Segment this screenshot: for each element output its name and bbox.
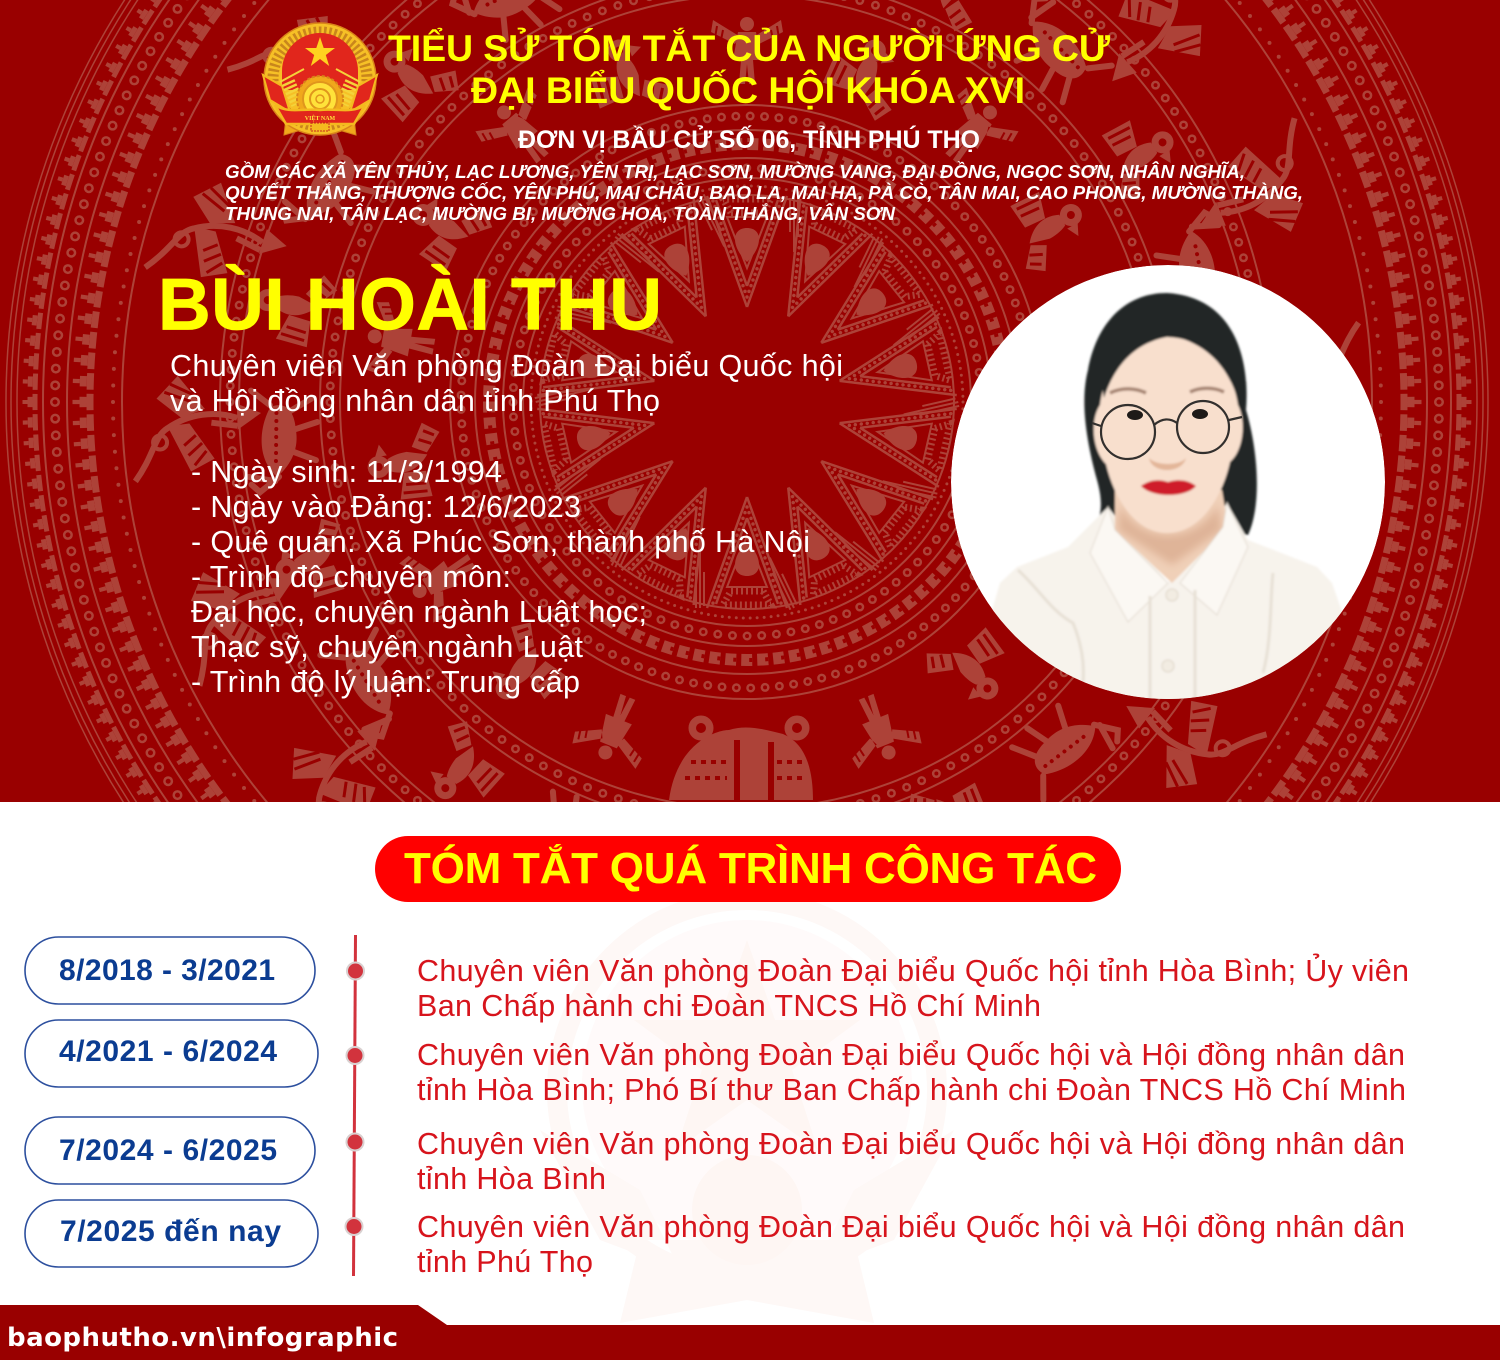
nose	[1149, 458, 1186, 470]
period 1	[25, 937, 315, 1004]
period 2	[25, 1020, 318, 1087]
entry 1	[417, 952, 1409, 1023]
portrait photo	[951, 265, 1385, 720]
watermark emblem	[540, 900, 954, 1323]
footer bar	[0, 1305, 1500, 1360]
entry 4	[417, 1210, 1405, 1279]
hair	[1072, 293, 1257, 544]
period 1: 8/2018 - 3/2021	[59, 954, 275, 987]
entry 2	[417, 1038, 1406, 1107]
text block: personal details: - Ngày sinh: 11/3/1994	[191, 455, 502, 489]
hairline	[1101, 335, 1236, 398]
text block: position: và Hội đồng nhân dân tỉnh Phú Thọ	[170, 384, 660, 418]
text block: personal details: - Trình độ lý luận: Trung cấp	[191, 665, 580, 699]
title: ĐẠI BIỂU QUỐC HỘI KHÓA XVI	[471, 69, 1025, 111]
shirt details	[1018, 570, 1273, 700]
shirt	[960, 503, 1380, 720]
crane band	[133, 0, 1384, 802]
entry 4: tỉnh Phú Thọ	[417, 1245, 593, 1279]
text block: personal details: - Trình độ chuyên môn:	[191, 560, 511, 594]
candidate name: BÙI HOÀI THU	[158, 264, 662, 346]
heading pill: work history	[375, 836, 1121, 902]
period 4	[25, 1200, 318, 1267]
entry 3: Chuyên viên Văn phòng Đoàn Đại biểu Quốc hội và Hội đồng nhân dân	[417, 1127, 1405, 1161]
entry 3	[417, 1127, 1405, 1196]
text block: communes list: THUNG NAI, TÂN LẠC, MƯỜNG BI, MƯỜNG HOA, TOÀN THẮNG, VÂN SƠN	[225, 203, 895, 224]
panel: red header with bronze drum pattern	[0, 0, 1500, 802]
timeline dots	[346, 962, 364, 1235]
period 3: 7/2024 - 6/2025	[59, 1134, 277, 1167]
face	[1094, 337, 1243, 533]
title: TIỂU SỬ TÓM TẮT CỦA NGƯỜI ỨNG CỬ	[388, 27, 1111, 69]
text block: personal details: Thạc sỹ, chuyên ngành Luật	[191, 630, 584, 664]
icon: national emblem	[263, 23, 377, 135]
text block: personal details: - Ngày vào Đảng: 12/6/2023	[191, 490, 581, 524]
drum pattern background	[5, 0, 1489, 802]
collar	[1106, 504, 1168, 622]
entry 3: tỉnh Hòa Bình	[417, 1162, 606, 1196]
text block: communes list: QUYẾT THẮNG, THƯỢNG CỐC, YÊN PHÚ, MAI CHÂU, BAO LA, MAI HẠ, PÀ CÒ, TÂN MAI, CAO PHONG, MƯỜNG THÀNG,	[225, 182, 1303, 203]
icon: national emblem: VIỆT NAM	[305, 114, 336, 122]
timeline line	[354, 935, 356, 1276]
period 2: 4/2021 - 6/2024	[59, 1035, 277, 1068]
heading pill: work history: TÓM TẮT QUÁ TRÌNH CÔNG TÁC	[404, 842, 1097, 893]
entry 1: Ban Chấp hành chi Đoàn TNCS Hồ Chí Minh	[417, 989, 1041, 1023]
entry 1: Chuyên viên Văn phòng Đoàn Đại biểu Quốc hội tỉnh Hòa Bình; Ủy viên	[417, 952, 1409, 988]
text block: personal details: Đại học, chuyên ngành Luật học;	[191, 595, 647, 629]
entry 4: Chuyên viên Văn phòng Đoàn Đại biểu Quốc hội và Hội đồng nhân dân	[417, 1210, 1405, 1244]
house dome	[669, 716, 813, 800]
footer bar: baophutho.vn\infographic	[7, 1323, 398, 1353]
neck	[1115, 490, 1228, 583]
lips	[1141, 480, 1196, 495]
eyes	[1127, 409, 1208, 420]
text block: personal details: - Quê quán: Xã Phúc Sơn, thành phố Hà Nội	[191, 525, 810, 559]
entry 2: tỉnh Hòa Bình; Phó Bí thư Ban Chấp hành chi Đoàn TNCS Hồ Chí Minh	[417, 1073, 1406, 1107]
figures band	[362, 17, 1133, 772]
title	[388, 27, 1111, 111]
eyebrows	[1110, 388, 1224, 393]
chin shadow	[1118, 505, 1222, 565]
deer band	[243, 0, 1248, 904]
glasses	[1092, 401, 1242, 459]
period 4: 7/2025 đến nay	[60, 1215, 281, 1248]
period 3	[25, 1117, 315, 1184]
text block: position	[170, 349, 843, 418]
text block: position: Chuyên viên Văn phòng Đoàn Đại biểu Quốc hội	[170, 349, 843, 383]
text block: communes list	[225, 161, 1303, 224]
heading: electoral unit: ĐƠN VỊ BẦU CỬ SỐ 06, TỈNH PHÚ THỌ	[518, 124, 980, 154]
text block: communes list: GỒM CÁC XÃ YÊN THỦY, LẠC LƯƠNG, YÊN TRỊ, LẠC SƠN, MƯỜNG VANG, ĐẠI ĐỒNG, NGỌC SƠN, NHÂN NGHĨA,	[225, 161, 1245, 182]
text block: personal details	[191, 455, 810, 699]
entry 2: Chuyên viên Văn phòng Đoàn Đại biểu Quốc hội và Hội đồng nhân dân	[417, 1038, 1405, 1072]
